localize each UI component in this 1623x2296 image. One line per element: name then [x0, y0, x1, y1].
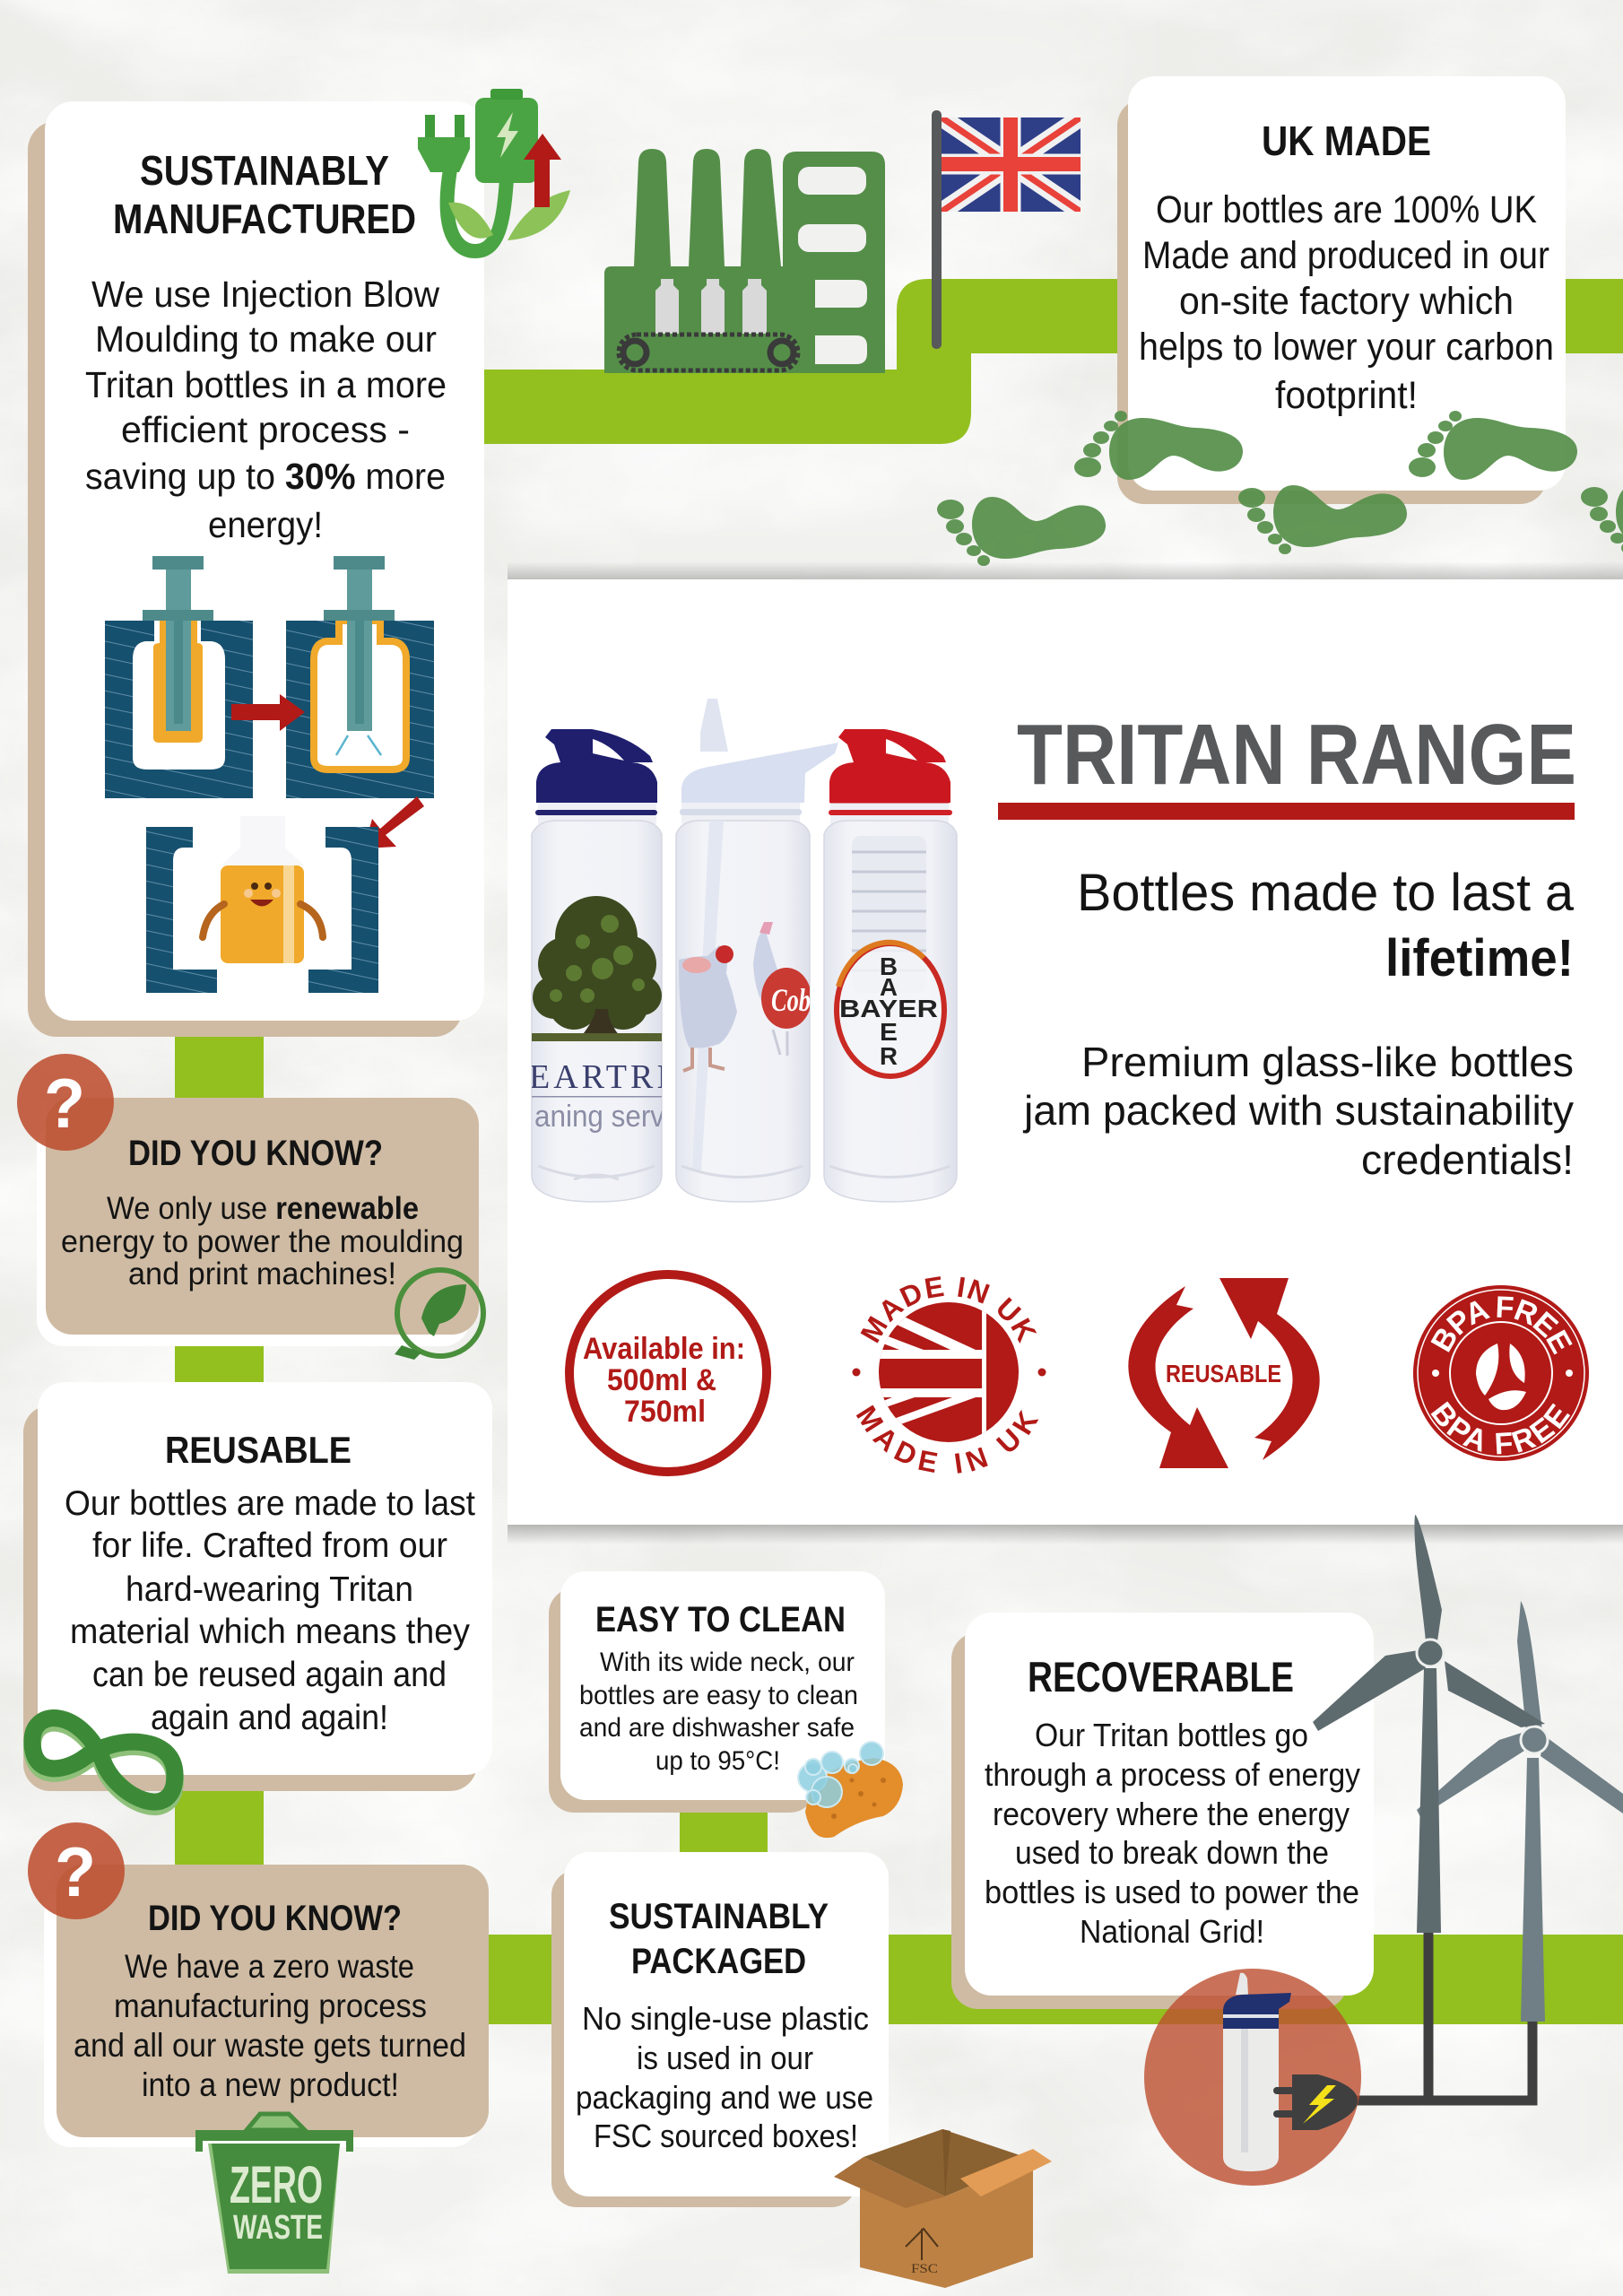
panel: sustainably packaged [551, 1852, 889, 2207]
panel: did you know, renewable [17, 1054, 479, 1346]
text: zero waste body: into a new product! [142, 2066, 399, 2103]
panel: sustainably manufactured [28, 101, 484, 1037]
icon: question mark [17, 1054, 114, 1151]
text: recoverable body [985, 1717, 1360, 1950]
panel: easy to clean [549, 1571, 885, 1813]
green path: left vertical connector [175, 1027, 264, 1879]
text: UK made body: on-site factory which [1179, 280, 1514, 323]
panel: Tritan range [508, 565, 1623, 1542]
heading: did you know: DID YOU KNOW? [148, 1899, 402, 1938]
text: UK made body: helps to lower your carbon [1139, 326, 1554, 369]
text: tagline: lifetime! [1385, 929, 1574, 987]
heading: recoverable: RECOVERABLE [1028, 1653, 1294, 1700]
text: packaged body [576, 2000, 873, 2154]
heading: did you know: DID YOU KNOW? [128, 1134, 383, 1173]
icon: leaf plug [395, 1270, 483, 1360]
icon: FSC cardboard box [834, 2129, 1052, 2288]
text: packaged body: is used in our [637, 2039, 813, 2076]
arrow: step 1 to 2 [231, 694, 305, 731]
text: easy to clean body [579, 1648, 858, 1776]
badge: made in UK: MADE IN UK [861, 1276, 1037, 1344]
text: UK made body: Our bottles are 100% UK [1156, 188, 1537, 231]
icon: wind turbine front [1313, 1515, 1545, 1933]
text: zero waste body [74, 1948, 466, 2103]
badge: BPA free: BPA FREE [1431, 1401, 1570, 1455]
text: UK made body [1139, 188, 1554, 417]
text: reusable body: material which means they [70, 1613, 470, 1651]
text: recoverable body: Our Tritan bottles go [1035, 1717, 1308, 1753]
panel: UK made [1117, 76, 1566, 504]
cables: turbine to plug [1354, 1933, 1532, 2100]
bottle: red lid with Bayer logo: A [880, 973, 898, 1001]
text: manufacturing body [85, 274, 447, 545]
badge: available sizes: 500ml & [607, 1363, 716, 1397]
text: manufacturing body: Tritan bottles in a more [85, 364, 447, 405]
panel: reusable [23, 1382, 492, 1791]
text: premium description: jam packed with sustainability [1022, 1087, 1574, 1134]
text: recoverable body: used to break down the [1015, 1834, 1329, 1871]
text: reusable body: Our bottles are made to last [65, 1484, 475, 1523]
icon: soapy sponge [798, 1742, 903, 1838]
mould step 3 [146, 816, 378, 993]
icon: question mark: ? [55, 1832, 96, 1911]
text: manufacturing body: Moulding to make our [95, 318, 437, 360]
bottle: navy lid with tree logo: aning serv [534, 1100, 664, 1134]
text: zero waste body: and all our waste gets turned [74, 2027, 466, 2064]
badge: BPA free [1413, 1285, 1589, 1461]
text: renewable body [61, 1191, 464, 1292]
text: manufacturing body: We use Injection Blow [91, 274, 439, 315]
green path: top band to UK made [484, 279, 1623, 444]
text: zero waste body: manufacturing process [114, 1987, 427, 2024]
text: packaged body: packaging and we use [576, 2079, 873, 2116]
heading: sustainably packaged: SUSTAINABLY [609, 1897, 829, 1936]
text: reusable body: for life. Crafted from our [92, 1526, 447, 1565]
text: easy to clean body: and are dishwasher safe [579, 1713, 855, 1743]
text: packaged body: No single-use plastic [582, 2000, 869, 2037]
title underline [998, 803, 1575, 820]
text: reusable body [65, 1484, 475, 1737]
green path: middle connector [680, 1803, 768, 1866]
green path: bottom band [484, 1935, 1623, 2024]
icon: question mark [28, 1822, 125, 1919]
icon: zero waste bin: ZERO [230, 2156, 323, 2214]
text: manufacturing body: saving up to 30% more [85, 456, 446, 497]
diagram: injection blow moulding [105, 556, 434, 993]
text: reusable body: again and again! [151, 1699, 388, 1737]
bottle: red lid with Bayer logo: E [880, 1018, 898, 1046]
icon: infinity loop [32, 1718, 175, 1806]
bottle: navy lid with tree logo: EARTRI [529, 1058, 668, 1096]
text: recoverable body: bottles is used to power the [985, 1874, 1359, 1910]
heading: sustainably packaged [609, 1897, 829, 1981]
text: manufacturing body: energy! [208, 504, 323, 545]
bottle: white lid with chicken logo [676, 699, 838, 1202]
text: renewable body: We only use renewable [107, 1191, 419, 1226]
bottle: white lid with chicken logo: Cob [771, 982, 811, 1018]
icon: question mark: ? [44, 1064, 85, 1143]
bottle: red lid with Bayer logo: B [880, 952, 898, 980]
heading: reusable: REUSABLE [165, 1429, 352, 1471]
icon: power plug [1273, 2074, 1358, 2130]
icon: wind turbine rear [1417, 1601, 1623, 2022]
arrow: step 2 to 3 [364, 796, 424, 848]
badge: reusable [1128, 1278, 1320, 1468]
mould step 2 [286, 556, 434, 798]
badge: reusable: REUSABLE [1166, 1360, 1281, 1387]
bottle: red lid with Bayer logo: R [880, 1042, 898, 1070]
icon: carbon footprints [937, 411, 1623, 566]
bottle: red lid with Bayer logo: BAYER [839, 995, 938, 1022]
text: reusable body: hard-wearing Tritan [126, 1570, 413, 1609]
text: manufacturing body: efficient process - [121, 409, 410, 450]
text: tagline: Bottles made to last a [1077, 864, 1575, 922]
icon: union flag on pole [932, 110, 1081, 349]
bottle: red lid with Bayer logo [824, 729, 957, 1202]
badge: BPA free: BPA FREE [1431, 1296, 1573, 1354]
icon: green energy plug and battery [418, 89, 570, 251]
text: renewable body: energy to power the moulding [61, 1224, 464, 1259]
heading: sustainably manufactured: MANUFACTURED [113, 196, 416, 242]
mould step 1 [105, 556, 253, 798]
text: easy to clean body: up to 95°C! [655, 1746, 780, 1776]
panel: recoverable [951, 1613, 1374, 2009]
text: recoverable body: through a process of energy [985, 1756, 1360, 1793]
badge: available sizes: 750ml [624, 1395, 706, 1429]
badge: available sizes [569, 1274, 767, 1472]
icon: zero waste bin [195, 2114, 353, 2274]
icon: bottle in red circle with plug [1144, 1969, 1361, 2186]
text: tagline [1077, 864, 1575, 987]
badge: made in UK: MADE IN UK [855, 1405, 1038, 1474]
heading: sustainably manufactured: SUSTAINABLY [140, 147, 389, 194]
heading: sustainably manufactured [113, 147, 416, 242]
text: zero waste body: We have a zero waste [125, 1948, 414, 1985]
text: premium description: credentials! [1361, 1136, 1574, 1183]
heading: UK made: UK MADE [1262, 117, 1431, 164]
text: premium description: Premium glass-like bottles [1081, 1039, 1574, 1085]
heading: sustainably packaged: PACKAGED [631, 1942, 806, 1981]
text: recoverable body: recovery where the energy [993, 1796, 1350, 1832]
badge: available sizes: Available in: [583, 1332, 745, 1366]
text: UK made body: Made and produced in our [1142, 234, 1549, 277]
heading: easy to clean: EASY TO CLEAN [595, 1600, 846, 1639]
text: reusable body: can be reused again and [92, 1656, 447, 1694]
text: easy to clean body: bottles are easy to clean [579, 1681, 858, 1710]
panel: did you know, zero waste [28, 1822, 489, 2147]
text: UK made body: footprint! [1275, 374, 1418, 417]
badge: made in UK [852, 1276, 1046, 1474]
icon: factory [604, 149, 885, 373]
text: recoverable body: National Grid! [1080, 1913, 1264, 1950]
icon: FSC cardboard box: FSC [911, 2262, 938, 2276]
bottle: navy lid with tree logo [529, 729, 668, 1202]
text: easy to clean body: With its wide neck, our [600, 1648, 855, 1677]
text: packaged body: FSC sourced boxes! [594, 2118, 858, 2154]
icon: zero waste bin: WASTE [233, 2209, 323, 2247]
text: renewable body: and print machines! [128, 1257, 396, 1292]
text: premium description [1022, 1039, 1574, 1183]
